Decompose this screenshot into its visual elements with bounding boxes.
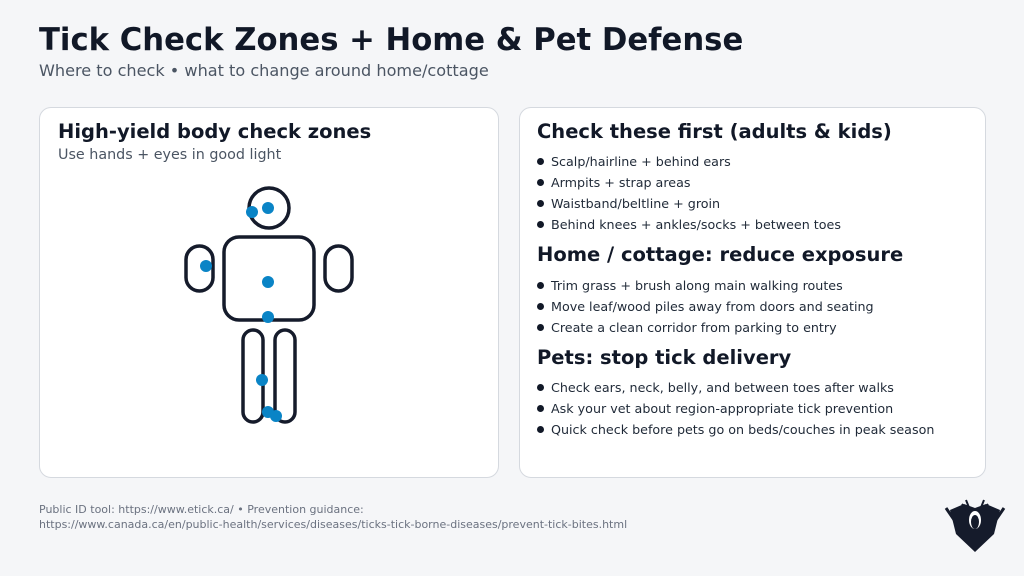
list: pets: Check ears, neck, belly, and between toes after walks: [551, 380, 894, 395]
panel: body check zones: [39, 107, 499, 478]
list: check first: Scalp/hairline + behind ears: [551, 154, 731, 169]
list: check first: Armpits + strap areas: [551, 175, 690, 190]
list: check first: [537, 154, 841, 232]
list: home: Create a clean corridor from parking to entry: [551, 320, 837, 335]
title: Tick Check Zones + Home & Pet Defense: [39, 23, 743, 58]
list: pets: Ask your vet about region-appropriate tick prevention: [551, 401, 893, 416]
heading: home: Home / cottage: reduce exposure: [537, 243, 903, 266]
list: home: Trim grass + brush along main walking routes: [551, 278, 843, 293]
heading: check first: Check these first (adults & kids): [537, 120, 892, 143]
panel heading: High-yield body check zones: [58, 120, 371, 143]
panel subheading: Use hands + eyes in good light: [58, 147, 281, 163]
logo: deer crest: [944, 500, 1006, 552]
subtitle: Where to check • what to change around home/cottage: [39, 61, 489, 80]
footer sources: [39, 503, 627, 531]
panel: checklists: [519, 107, 986, 478]
footer sources: https://www.canada.ca/en/public-health/services/diseases/ticks-tick-borne-diseases/prevent-tick-bites.html: [39, 518, 627, 531]
list: pets: [537, 380, 934, 437]
list: home: [537, 278, 874, 335]
heading: pets: Pets: stop tick delivery: [537, 346, 791, 369]
list: check first: Behind knees + ankles/socks + between toes: [551, 217, 841, 232]
list: home: Move leaf/wood piles away from doors and seating: [551, 299, 874, 314]
list: pets: Quick check before pets go on beds/couches in peak season: [551, 422, 934, 437]
list: check first: Waistband/beltline + groin: [551, 196, 720, 211]
footer sources: Public ID tool: https://www.etick.ca/ • Prevention guidance:: [39, 503, 364, 516]
